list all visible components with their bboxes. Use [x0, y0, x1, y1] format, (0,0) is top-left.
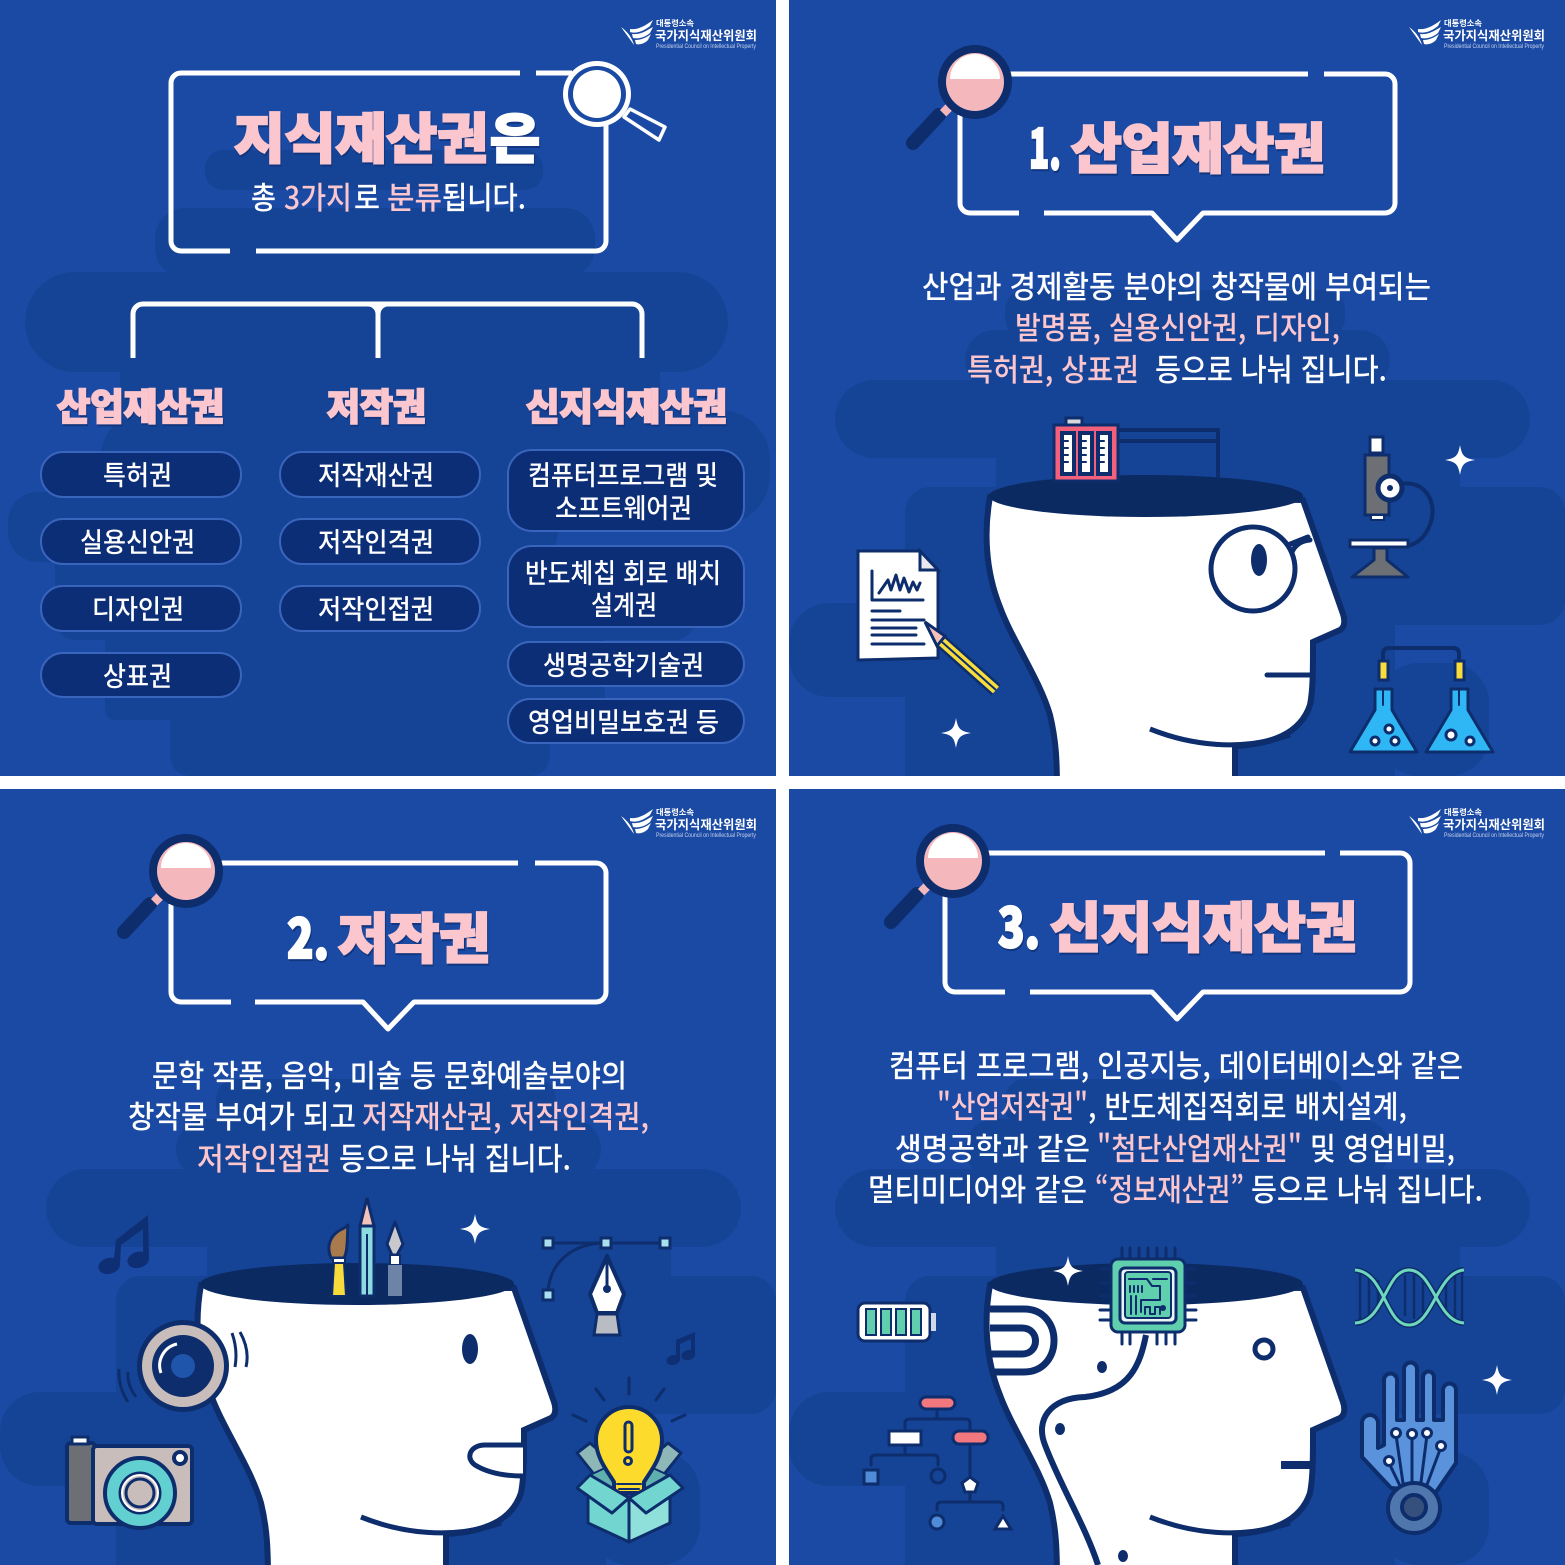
icon: small music note [666, 1332, 695, 1365]
column: 저작권 [280, 377, 480, 631]
column: 신지식재산권 [508, 377, 744, 743]
icon: camera [67, 1437, 192, 1528]
logo: 국가지식재산위원회 [1443, 814, 1545, 833]
title box with magnifier: 됩니다. [442, 173, 526, 218]
icon: magnifier [891, 824, 990, 922]
icon: microchip [1100, 1248, 1196, 1344]
logo: 국가지식재산위원회 [1443, 25, 1545, 44]
panel: 3. new intellectual property [789, 789, 1565, 1565]
icon: large music note [98, 1215, 149, 1274]
icon: light bulb in box [573, 1378, 685, 1542]
icon: lens on the ear [119, 1320, 247, 1412]
body text: 등으로 나눠 집니다. [1155, 345, 1387, 390]
logo: Presidential Council on Intellectual Property: Presidential Council on Intellectual Property [656, 44, 756, 50]
logo: Presidential Council on Intellectual Property [656, 833, 756, 839]
logo [1409, 18, 1545, 50]
logo: Presidential Council on Intellectual Property: 국가지식재산위원회 [655, 25, 757, 44]
logo [1409, 807, 1545, 839]
logo: Presidential Council on Intellectual Property: 대통령소속 [656, 18, 695, 29]
body text: 멀티미디어와 같은 [868, 1165, 1087, 1210]
column: 산업재산권: 실용신안권 [80, 521, 195, 560]
speech-bubble title [960, 74, 1395, 240]
title box with magnifier: 총 [251, 173, 276, 218]
column: 산업재산권: 특허권 [103, 454, 172, 493]
column: 저작권: 저작권 [327, 377, 426, 431]
icon: magnifier [124, 834, 223, 932]
body text: "산업저작권" [937, 1082, 1088, 1127]
head with open mouth [198, 1263, 555, 1565]
speech-bubble title: 신지식재산권 [1050, 884, 1357, 963]
logo: 대통령소속 [1444, 807, 1483, 818]
body text: 생명공학과 같은 [895, 1124, 1090, 1169]
column: 산업재산권: 디자인권 [92, 588, 184, 627]
body text: “정보재산권” [1095, 1165, 1244, 1210]
column: 신지식재산권: 영업비밀보호권 등 [528, 701, 719, 740]
logo: 대통령소속 [1444, 18, 1483, 29]
connector tree [133, 304, 642, 358]
title box with magnifier [171, 61, 665, 251]
body text [868, 1041, 1483, 1210]
logo: 국가지식재산위원회 [655, 814, 757, 833]
icon: document and pencil [858, 551, 996, 690]
icon: sparkle [1053, 1256, 1083, 1286]
column: 신지식재산권: 생명공학기술권 [543, 644, 704, 683]
panel: overview of intellectual property rights [0, 0, 776, 776]
speech-bubble title: 저작권 [338, 895, 490, 974]
body text: , 반도체집적회로 배치설계, [1088, 1082, 1407, 1127]
icon: DNA helix [1355, 1270, 1464, 1325]
title box with magnifier: 분류 [387, 173, 442, 218]
column: 저작권: 저작재산권 [318, 454, 434, 493]
icon: sparkle [460, 1214, 490, 1244]
column: 신지식재산권: 컴퓨터프로그램 및 [528, 454, 718, 493]
logo: Presidential Council on Intellectual Property [1444, 44, 1544, 50]
body text: 및 영업비밀, [1310, 1124, 1455, 1169]
head with circuit [987, 1263, 1344, 1565]
title box with magnifier: 지식재산권 [234, 95, 488, 174]
speech-bubble title: 산업재산권 [1071, 105, 1325, 184]
icon: microscope [1350, 437, 1433, 577]
icon: sparkle [1445, 445, 1475, 475]
body text: 저작인접권 [197, 1134, 331, 1179]
column: 저작권: 저작인격권 [318, 521, 434, 560]
column: 산업재산권: 상표권 [103, 655, 172, 694]
column: 저작권: 저작인접권 [318, 588, 434, 627]
body text: "첨단산업재산권" [1097, 1124, 1302, 1169]
body text: 등으로 나눠 집니다. [1251, 1165, 1483, 1210]
column: 산업재산권 [41, 377, 241, 697]
icon: sparkle [1482, 1365, 1512, 1395]
body text: 등으로 나눠 집니다. [339, 1134, 571, 1179]
body text: 문학 작품, 음악, 미술 등 문화예술분야의 [152, 1051, 627, 1096]
logo: 대통령소속 [656, 807, 695, 818]
title box with magnifier: 3가지 [284, 173, 352, 218]
body text: 발명품, 실용신안권, 디자인, [1015, 303, 1340, 348]
icon: vector pen tool [543, 1238, 670, 1335]
logo: Presidential Council on Intellectual Property [621, 18, 757, 50]
column: 신지식재산권: 설계권 [591, 584, 657, 623]
logo: Presidential Council on Intellectual Property [1444, 833, 1544, 839]
body text: 저작재산권, 저작인격권, [362, 1092, 649, 1137]
icon: robotic hand [1362, 1362, 1456, 1533]
body text [922, 262, 1431, 390]
body text: 특허권, 상표권 [967, 345, 1139, 390]
column: 신지식재산권: 반도체칩 회로 배치 [525, 552, 721, 591]
column: 신지식재산권: 소프트웨어권 [555, 487, 692, 526]
body text [128, 1051, 649, 1179]
body text: 창작물 부여가 되고 [128, 1092, 356, 1137]
body text: 산업과 경제활동 분야의 창작물에 부여되는 [922, 262, 1431, 307]
icon: battery [858, 1303, 936, 1341]
column: 산업재산권: 산업재산권 [57, 377, 224, 431]
speech-bubble title: 2. [287, 895, 329, 974]
title box with magnifier: 은 [490, 95, 540, 174]
icon: brush, pencil and pen [329, 1198, 403, 1296]
speech-bubble title: 1. [1029, 105, 1061, 184]
head with glasses [987, 475, 1344, 790]
title box with magnifier: 로 [354, 173, 380, 218]
logo [621, 807, 757, 839]
speech-bubble title [945, 853, 1410, 1019]
icon: flow tree [864, 1397, 1011, 1529]
body text: 컴퓨터 프로그램, 인공지능, 데이터베이스와 같은 [889, 1041, 1463, 1086]
speech-bubble title [171, 863, 606, 1029]
column: 신지식재산권: 신지식재산권 [526, 377, 727, 431]
panel: 1. industrial property [789, 0, 1565, 790]
icon: sparkle [941, 718, 971, 748]
icon: magnifier [913, 45, 1012, 143]
icon: connected flasks [1350, 648, 1493, 752]
panel: 2. copyright [0, 789, 776, 1565]
speech-bubble title: 3. [998, 884, 1040, 963]
icon: test tubes with pipes [1054, 418, 1218, 481]
